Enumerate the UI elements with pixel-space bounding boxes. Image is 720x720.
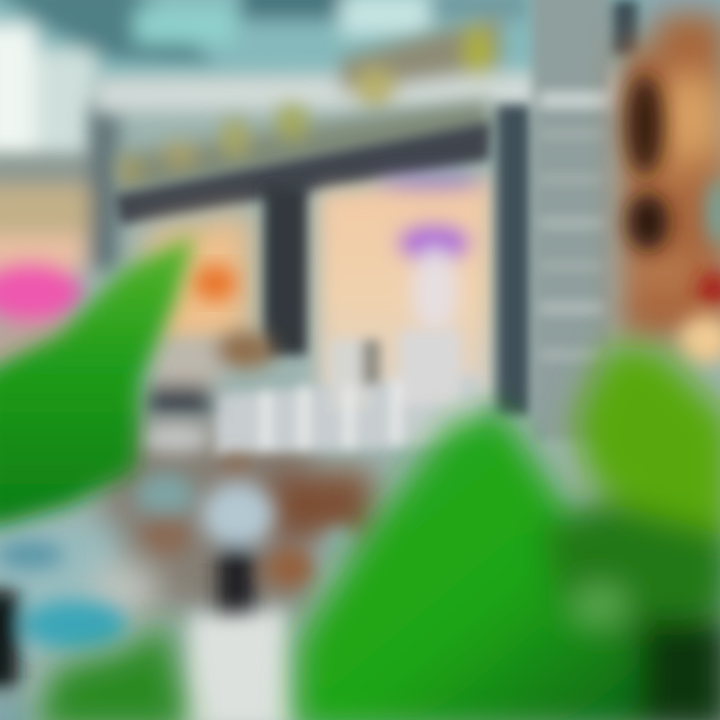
floor [180,610,295,720]
right side: wooden shelves and figure [620,14,720,340]
bottom left: teal garment and dark foliage [0,541,127,720]
grey tiled pillar [532,0,638,440]
right green foliage [295,345,720,720]
balustrade with vertical stripes [215,330,480,455]
upper roof band [95,15,620,112]
dark pillar edge [497,105,531,415]
shopfront: right peach window [318,175,492,400]
background: ceiling and sky [0,0,720,160]
left shop: distant storefront [0,105,118,372]
bottom left leaf [35,620,190,720]
right side: dark shelf gaps, teal and red accents [627,75,720,364]
escalator and people on the left [137,332,275,452]
dark column between shops [264,185,308,355]
left green leaf [0,235,195,525]
shopper figure [135,456,358,640]
bottom left: blue shoppers [0,525,160,645]
shopfront: left peach window [145,212,252,350]
atrium floor and shoppers [100,420,373,610]
dark fascia [115,122,490,225]
orange sign [193,265,237,301]
shop sign band [115,100,490,195]
